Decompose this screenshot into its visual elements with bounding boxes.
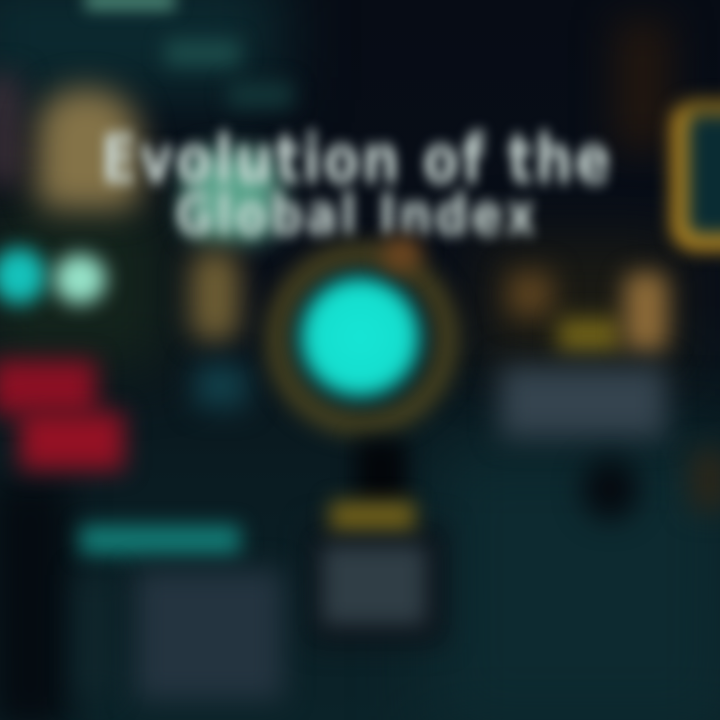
right panel: tan block bbox=[624, 272, 668, 352]
background: left dark column bbox=[0, 480, 70, 720]
title line one: Evolution of the bbox=[101, 121, 613, 198]
tan panel: centre left bbox=[190, 250, 240, 342]
background: lower teal floor bbox=[430, 440, 720, 720]
red chart block lower bbox=[20, 412, 124, 470]
teal panel: centre left bbox=[195, 364, 247, 408]
gauge ring bbox=[266, 243, 458, 435]
lower right tan smear bbox=[690, 450, 720, 510]
header bar: second bbox=[165, 40, 240, 66]
left edge accent bbox=[0, 75, 20, 185]
icon: cyan dot bbox=[0, 248, 46, 304]
card body bbox=[310, 525, 445, 643]
right panel: yellow block bbox=[558, 318, 620, 352]
right panel: amber block bbox=[508, 272, 552, 316]
right dark circle bbox=[582, 458, 638, 520]
lower left heading bar bbox=[80, 525, 240, 555]
background: upper right amber haze bbox=[615, 20, 670, 150]
card header bbox=[330, 501, 415, 531]
gauge marker bbox=[382, 237, 422, 271]
connector bbox=[356, 440, 406, 504]
header bar: third bbox=[228, 82, 293, 108]
icon: mint dot bbox=[54, 254, 106, 304]
mint highlight behind title bbox=[186, 152, 278, 240]
right bracket: yellow bbox=[672, 100, 720, 250]
card text bbox=[322, 545, 426, 625]
lower left text block bbox=[135, 570, 283, 700]
background: mid left haze bbox=[0, 200, 170, 370]
header bar: top bbox=[85, 0, 175, 10]
centre card bbox=[314, 488, 450, 644]
title line two: Global Index bbox=[175, 183, 539, 248]
tan panel: upper left bbox=[36, 88, 140, 210]
background: right mid haze bbox=[480, 240, 680, 370]
central gauge bbox=[255, 226, 469, 444]
title bbox=[98, 121, 616, 248]
gauge core bbox=[300, 277, 420, 397]
right panel: grey text block bbox=[500, 366, 666, 438]
lower left side column bbox=[78, 575, 112, 697]
red chart block upper bbox=[0, 360, 96, 414]
background: upper left teal haze bbox=[0, 0, 280, 100]
